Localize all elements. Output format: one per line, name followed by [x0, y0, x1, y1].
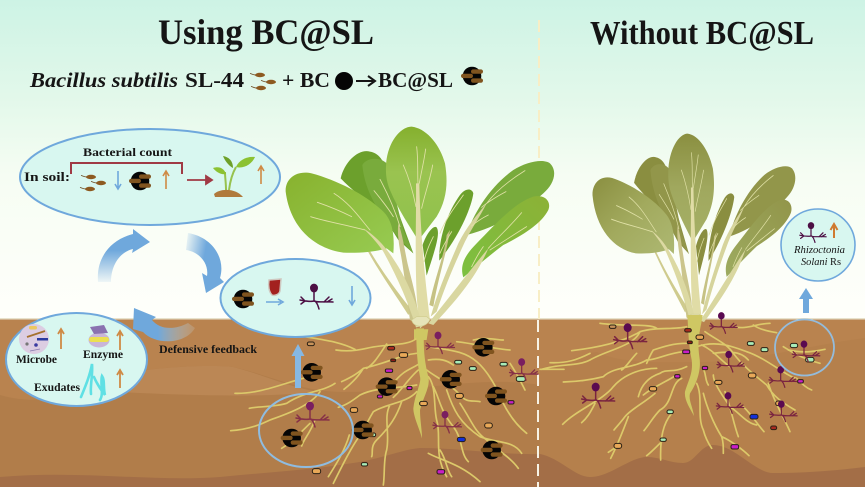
taproot	[685, 315, 703, 416]
icon: BC@SL composite	[461, 67, 483, 85]
divider: dashed line	[538, 20, 540, 319]
arrow: up orange	[163, 171, 169, 189]
icon: biochar	[335, 72, 353, 90]
Rhizoctonia solani pathogens	[582, 312, 820, 422]
right soil microbes	[582, 312, 820, 449]
icon: pathogen	[800, 222, 826, 242]
right roots	[540, 315, 825, 460]
arrow: red result	[187, 176, 212, 184]
title: using BC@SL: Using BC@SL	[158, 12, 374, 52]
circle: rhizosphere zoom, left	[259, 394, 353, 467]
label: defensive feedback: Defensive feedback	[159, 344, 258, 356]
right plant	[593, 134, 795, 336]
soil background	[0, 319, 865, 487]
arrow: forms	[356, 76, 375, 86]
arrow: up orange	[117, 331, 123, 350]
formula line	[29, 67, 483, 92]
arrow: up orange	[258, 166, 264, 184]
icon: microbe	[19, 324, 49, 354]
icon: bacteria	[80, 175, 106, 191]
icon: bacteria	[250, 73, 276, 90]
arrow: up from rhizosphere, left	[292, 344, 304, 388]
icon: BC@SL	[232, 290, 254, 308]
label: enzyme: Enzyme	[83, 349, 123, 361]
circular arrow: upper left	[98, 229, 150, 282]
root particles	[307, 342, 525, 474]
arrow: down blue	[115, 171, 121, 189]
formula: plus BC: + BC	[282, 68, 330, 92]
label: microbe: Microbe	[16, 354, 57, 366]
formula: Bacillus subtilis: Bacillus subtilis	[29, 68, 178, 92]
arrow: blue	[266, 299, 283, 305]
circle: rhizosphere zoom, right	[775, 320, 834, 376]
formula: SL-44: SL-44	[185, 68, 245, 92]
icon: enzyme	[88, 325, 110, 348]
arrow: up orange	[830, 224, 838, 238]
arrow: down blue	[349, 286, 355, 305]
icon: seedling	[213, 156, 255, 197]
root particles	[609, 325, 814, 449]
icon: BC@SL	[129, 172, 151, 190]
divider: dashed line in soil	[537, 320, 539, 487]
arrow: up from rhizosphere, right	[799, 288, 813, 313]
callout: Rhizoctonia solani	[781, 209, 855, 281]
bracket	[71, 163, 182, 174]
left soil microbes	[281, 332, 538, 474]
label: exudates: Exudates	[34, 382, 81, 394]
callout: BC@SL suppresses pathogen	[220, 259, 370, 337]
label: in soil: In soil:	[24, 169, 70, 184]
label: Solani Rs: Solani Rs	[801, 257, 841, 268]
arrow: up orange	[117, 370, 123, 388]
callout: microbe enzyme exudates	[6, 313, 147, 406]
callout: in soil bacterial count	[20, 129, 280, 225]
background sky	[0, 0, 865, 320]
BC@SL particles	[281, 338, 507, 459]
taproot	[413, 328, 429, 438]
icon: antagonist	[269, 279, 281, 295]
title: without BC@SL: Without BC@SL	[590, 15, 814, 52]
horizon shadow line	[0, 318, 865, 320]
icon: exudates	[81, 364, 105, 400]
icon: pathogen	[300, 284, 333, 309]
circular arrow: upper right	[186, 233, 224, 293]
left plant	[286, 127, 554, 340]
label: bacterial count: Bacterial count	[83, 145, 172, 159]
label: Rhizoctonia: Rhizoctonia	[793, 245, 845, 256]
arrow: up orange	[58, 329, 64, 349]
left roots	[231, 328, 527, 485]
Rhizoctonia solani pathogens	[296, 332, 538, 433]
circular arrow: defensive feedback	[133, 308, 195, 341]
formula: BC@SL: BC@SL	[378, 68, 453, 92]
